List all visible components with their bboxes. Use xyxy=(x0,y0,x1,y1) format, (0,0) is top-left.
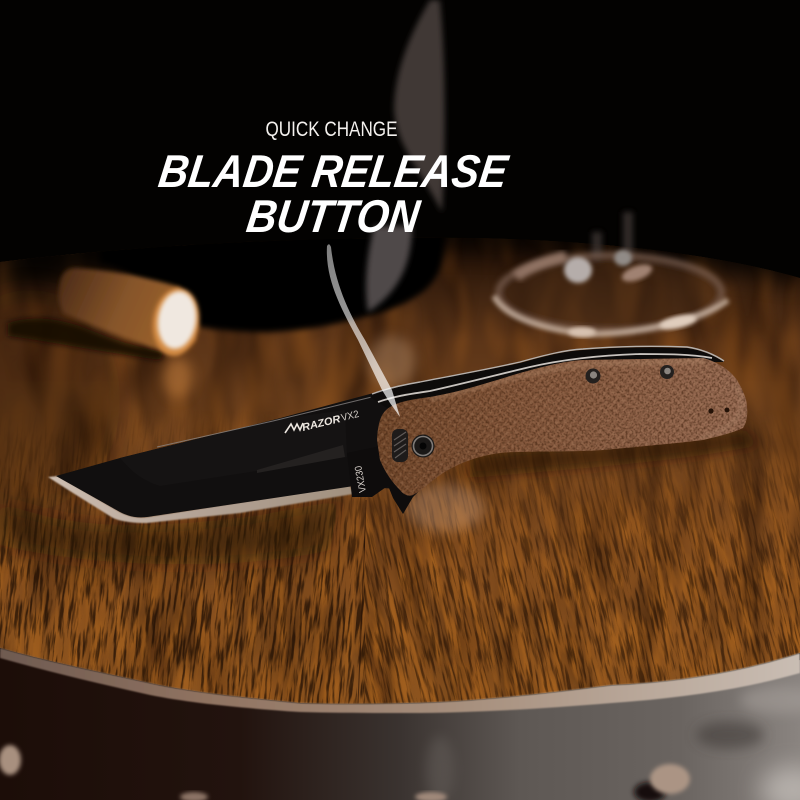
table rim xyxy=(0,648,800,713)
rivets xyxy=(0,745,690,800)
haze under handle xyxy=(405,484,485,532)
blade xyxy=(56,388,412,517)
knife shadow xyxy=(0,500,340,564)
blade logo xyxy=(285,409,361,434)
knife xyxy=(48,345,755,523)
plank seam xyxy=(358,500,366,704)
title xyxy=(156,145,512,242)
title: BUTTON xyxy=(244,190,424,242)
bottle base xyxy=(108,238,446,336)
blade tab xyxy=(347,445,396,497)
soft wood tone xyxy=(0,286,800,704)
left side vignette xyxy=(0,290,120,510)
glow under the bottle xyxy=(368,336,416,388)
back edge darkness xyxy=(0,225,800,296)
callout arrow xyxy=(327,244,400,417)
cork glow xyxy=(163,358,193,398)
wood grain right xyxy=(365,440,800,704)
glass stem xyxy=(597,212,628,262)
cork end xyxy=(148,285,204,359)
bottle reflections xyxy=(366,0,445,312)
cork body xyxy=(59,268,196,355)
wine glass xyxy=(494,212,728,337)
wine cork xyxy=(8,268,204,360)
pivot screw xyxy=(412,434,434,458)
lower tang xyxy=(385,478,420,514)
blade cutting edge xyxy=(48,476,353,523)
blade grind xyxy=(120,410,347,486)
handle liner xyxy=(370,347,724,410)
cork shadow xyxy=(8,318,165,360)
blade model mark: VX230 xyxy=(353,465,369,493)
spine line xyxy=(157,395,380,447)
blade fuller xyxy=(257,445,345,473)
blade logo: VX2 xyxy=(340,409,361,424)
blade logo: RAZOR xyxy=(301,413,342,434)
metal band xyxy=(0,652,800,800)
glass foot xyxy=(498,255,722,331)
blade release button xyxy=(392,429,408,462)
handle screws xyxy=(586,365,674,384)
handle scale xyxy=(377,358,748,496)
eyebrow text: QUICK CHANGE xyxy=(266,117,398,141)
title: BLADE RELEASE xyxy=(156,145,512,197)
table top xyxy=(0,225,800,720)
wood grain left xyxy=(0,428,365,704)
handle holes xyxy=(708,408,729,414)
